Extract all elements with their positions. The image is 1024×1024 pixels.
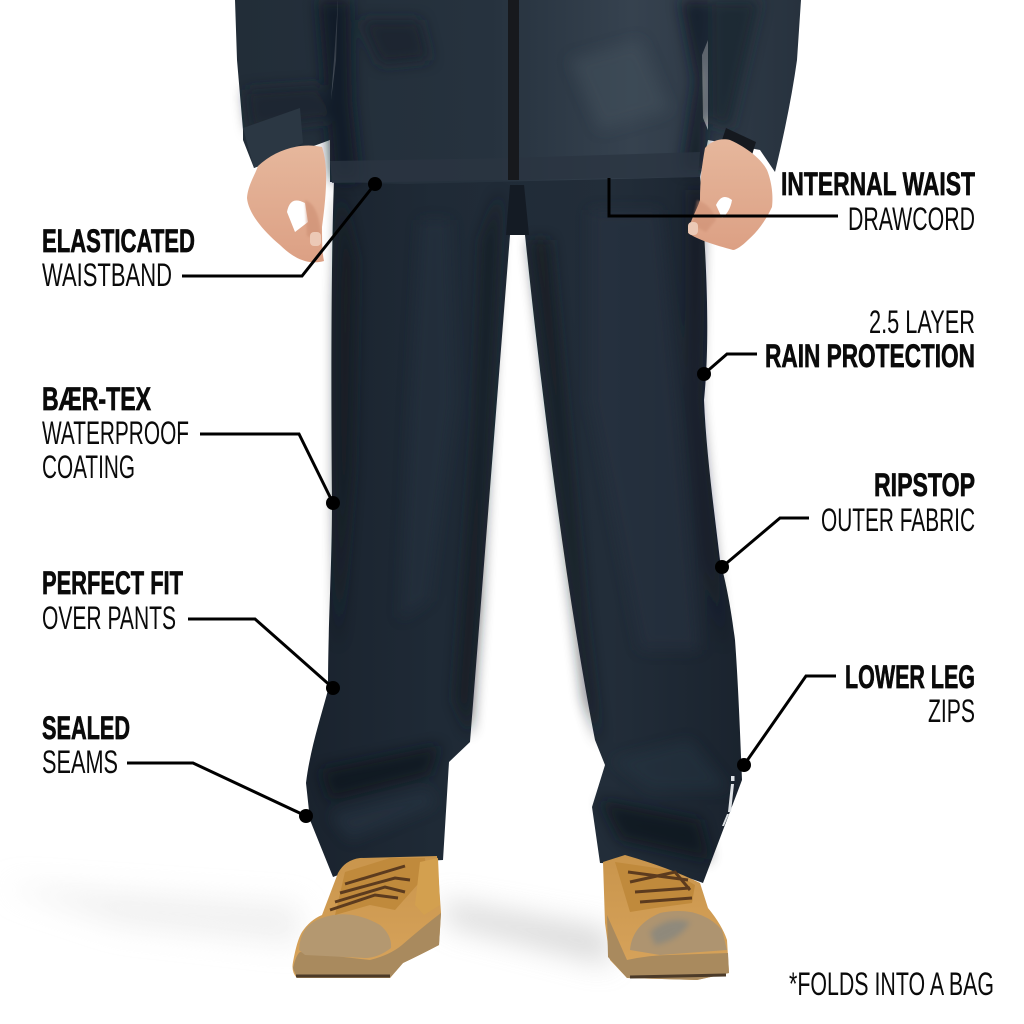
callout: baer-tex waterproof coating [42, 381, 340, 510]
icon: brand logo on leg [722, 776, 734, 826]
right hand [688, 139, 772, 250]
right boot [603, 855, 729, 980]
callout: rain protection: 2.5 LAYER [869, 304, 975, 340]
jacket [235, 0, 801, 184]
zipper [508, 0, 519, 180]
callout: elasticated waistband: ELASTICATED [42, 223, 195, 259]
pants [306, 175, 742, 883]
hem [330, 152, 700, 183]
left hand [247, 146, 326, 262]
callout: elasticated waistband [42, 177, 382, 293]
floor shadows [0, 885, 610, 965]
callout: baer-tex waterproof coating: COATING [42, 449, 135, 485]
cuff details [243, 108, 303, 168]
left boot [292, 856, 441, 978]
callout: baer-tex waterproof coating: BÆR-TEX [42, 381, 151, 417]
callout: ripstop outer fabric [715, 467, 975, 574]
photo: model wearing rain pants [235, 0, 801, 980]
callout: perfect fit over pants: OVER PANTS [42, 600, 176, 636]
callout: rain protection [697, 304, 975, 381]
callout: ripstop outer fabric: RIPSTOP [874, 467, 975, 503]
callout: perfect fit over pants [42, 565, 340, 695]
callout: internal waist drawcord [609, 166, 975, 237]
callout: lower leg zips [737, 659, 975, 772]
callout: elasticated waistband: WAISTBAND [42, 257, 172, 293]
callout: lower leg zips: ZIPS [928, 693, 975, 729]
callout: sealed seams [42, 710, 313, 823]
callout: perfect fit over pants: PERFECT FIT [42, 565, 183, 601]
callout: sealed seams: SEALED [42, 710, 130, 746]
callout: baer-tex waterproof coating: WATERPROOF [42, 415, 189, 451]
callout: sealed seams: SEAMS [42, 744, 118, 780]
